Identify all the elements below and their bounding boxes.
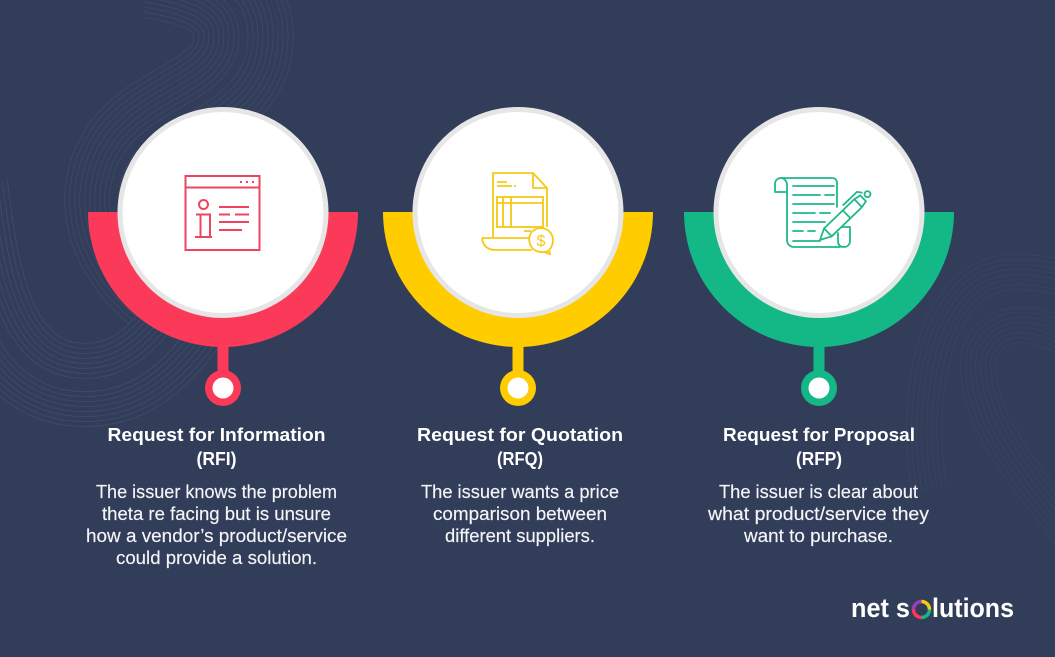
panel: RFI (86, 110, 358, 568)
green half ring (684, 212, 954, 347)
heading: Request for Quotation (RFQ) (417, 424, 623, 469)
white circle (415, 110, 621, 316)
heading: Request for Proposal (RFP) (723, 424, 915, 469)
description: RFQ (421, 482, 619, 546)
description: RFI: The issuer knows the problem (96, 482, 337, 502)
connector and node (500, 340, 536, 406)
connector and node (801, 340, 837, 406)
icon: contract and pen (775, 178, 873, 247)
background wave pattern: right (924, 272, 1055, 540)
icon: information window (186, 176, 260, 250)
logo: net solutions: lutions (932, 593, 1014, 623)
description: RFI: theta re facing but is unsure (102, 504, 331, 524)
logo: net solutions: net s (851, 593, 910, 623)
heading: Request for Proposal (RFP): Request for Proposal (723, 424, 915, 445)
heading: Request for Quotation (RFQ): (RFQ) (497, 448, 543, 469)
panel: RFP (684, 110, 954, 546)
heading: Request for Quotation (RFQ): Request for Quotation (417, 424, 623, 445)
red half ring (88, 212, 358, 347)
background wave pattern: left (0, 0, 243, 385)
heading: Request for Information (RFI): Request for Information (108, 424, 326, 445)
description: RFI (86, 482, 347, 568)
white circle (120, 110, 326, 316)
logo: net solutions (851, 593, 1014, 623)
logo ring (914, 602, 930, 618)
yellow half ring (383, 212, 653, 347)
description: RFP: want to purchase. (743, 526, 893, 546)
connector and node (205, 340, 241, 406)
description: RFP: The issuer is clear about (719, 482, 918, 502)
description: RFP (707, 482, 929, 546)
description: RFQ: different suppliers. (445, 526, 595, 546)
description: RFI: could provide a solution. (116, 548, 317, 568)
panel: RFQ (383, 110, 653, 546)
icon: quotation document (482, 173, 553, 254)
heading: Request for Information (RFI) (108, 424, 326, 469)
heading: Request for Information (RFI): (RFI) (196, 448, 236, 469)
description: RFI: how a vendor’s product/service (86, 526, 347, 546)
white circle (716, 110, 922, 316)
heading: Request for Proposal (RFP): (RFP) (796, 448, 842, 469)
description: RFQ: comparison between (433, 504, 607, 524)
description: RFQ: The issuer wants a price (421, 482, 619, 502)
description: RFP: what product/service they (707, 504, 929, 524)
icon: quotation document: $ (537, 233, 546, 250)
